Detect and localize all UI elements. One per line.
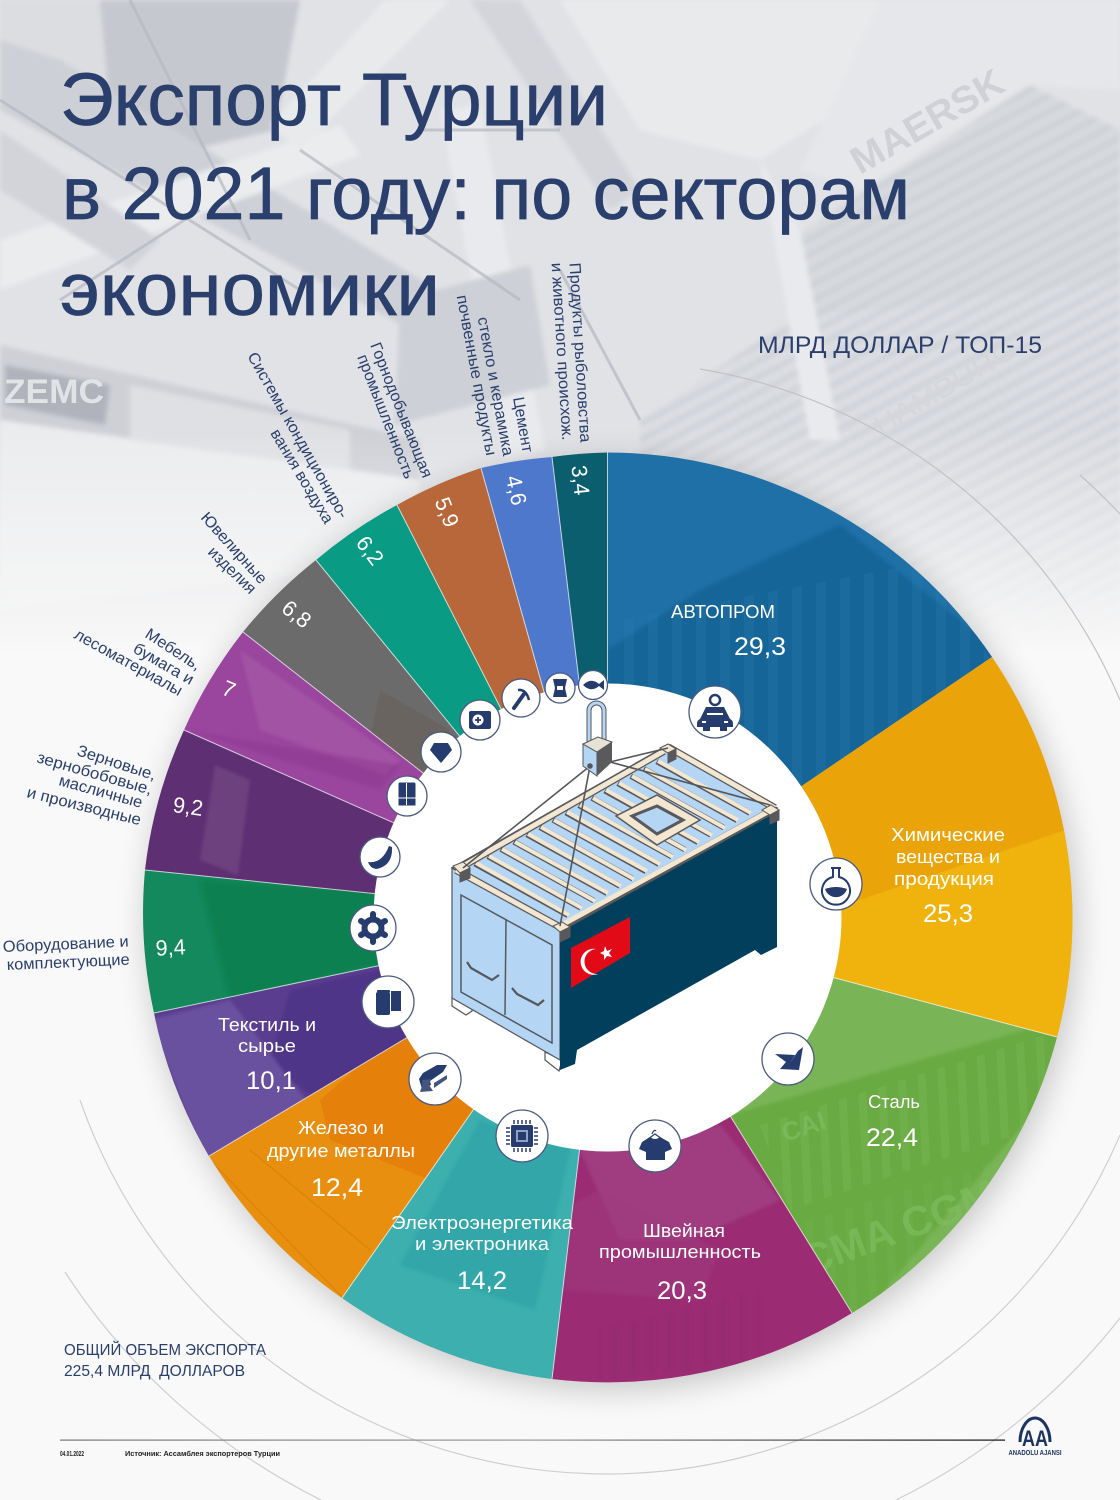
sector: electronics	[342, 1110, 580, 1379]
labels inside sectors: 20,3	[657, 1277, 707, 1305]
icon: textile rolls	[362, 976, 414, 1028]
labels inside sectors: 12,4	[311, 1174, 363, 1202]
footer rule	[60, 1440, 1005, 1441]
title: Экспорт Турции	[60, 58, 608, 141]
icon: banana	[360, 837, 400, 877]
labels inside sectors: Железо и	[298, 1118, 384, 1138]
donut chart	[143, 452, 1080, 1382]
sector: cement and glass	[481, 457, 608, 918]
labels inside sectors: АВТОПРОМ	[671, 602, 775, 622]
icon: diamond	[421, 732, 461, 772]
date: 04.01.2022	[60, 1451, 84, 1458]
sector: apparel	[552, 1116, 852, 1382]
outer sector labels: лесоматериалы	[71, 626, 185, 700]
total exports note: 225,4 МЛРД ДОЛЛАРОВ	[64, 1363, 245, 1380]
labels inside sectors: Химические	[891, 825, 1005, 845]
sector: fishery	[552, 452, 608, 918]
icon: iron beam	[409, 1053, 461, 1105]
total exports note: ОБЩИЙ ОБЪЕМ ЭКСПОРТА	[64, 1340, 266, 1359]
crane rigging lines	[463, 748, 770, 926]
sector: automotive	[608, 452, 992, 786]
background: port photo: MAERSK	[844, 61, 1012, 183]
labels inside sectors: 9,2	[171, 792, 205, 821]
title	[60, 58, 910, 331]
outer sector labels: бумага и	[130, 640, 197, 689]
outer sector labels: Системы кондициониро-	[244, 350, 351, 521]
outer sector labels	[2, 262, 593, 974]
labels inside sectors: 3,4	[566, 464, 594, 496]
container feet	[452, 998, 562, 1071]
outer sector labels: почвенные продукты	[453, 294, 499, 457]
outer sector labels: Горнодобывающая	[366, 340, 435, 480]
labels inside sectors: 29,3	[734, 633, 786, 661]
labels inside sectors: другие металлы	[267, 1141, 415, 1161]
labels inside sectors: 6,2	[351, 531, 389, 570]
logo: Anadolu Ajansi: ANADOLU AJANSI	[1008, 1450, 1062, 1457]
labels inside sectors: Электроэнергетика	[391, 1213, 574, 1233]
center hole	[374, 684, 842, 1152]
labels inside sectors: промышленность	[599, 1242, 761, 1262]
sector: chemicals	[801, 657, 1072, 1037]
sector: furniture and paper	[184, 632, 423, 822]
outer sector labels: Оборудование и	[2, 934, 129, 956]
outer sector labels: и производные	[25, 784, 143, 829]
icon: shirt	[629, 1120, 681, 1172]
labels inside sectors: вещества и	[896, 847, 1000, 867]
labels inside sectors: и электроника	[415, 1234, 550, 1254]
container roof	[452, 745, 777, 928]
sector: mining	[397, 468, 608, 918]
sector: air conditioning	[316, 505, 608, 918]
icon: gear	[350, 905, 396, 951]
door outlines and handles	[461, 895, 552, 1043]
labels inside sectors: Швейная	[643, 1221, 725, 1241]
sector: steel	[730, 978, 1057, 1313]
outer sector labels: комплектующие	[6, 952, 130, 974]
title: в 2021 году: по секторам	[62, 152, 910, 235]
outer sector labels: Продукты рыболовства	[566, 262, 593, 443]
labels inside sectors: Сталь	[868, 1092, 920, 1112]
logo: Anadolu Ajansi	[1008, 1418, 1062, 1457]
icon: fish	[578, 670, 608, 700]
outer sector labels: изделия	[204, 544, 259, 598]
labels inside sectors	[155, 464, 1005, 1305]
outer sector labels: зернобобовые,	[35, 750, 154, 799]
source: Источник: Ассамблея экспортеров Турции	[125, 1450, 280, 1458]
outer sector labels: Зерновые,	[75, 743, 158, 784]
outer sector labels: Цемент	[509, 396, 536, 454]
outer sector labels: и животного происхож.	[548, 262, 575, 441]
background: port photo: HAMBURG	[868, 334, 1022, 440]
container left door face	[452, 868, 560, 1060]
corner blocks	[453, 744, 779, 942]
sector: iron and metals	[209, 1038, 474, 1298]
sector: textiles	[154, 966, 407, 1156]
sector: jewelry	[243, 560, 460, 774]
icon: microchip	[496, 1110, 548, 1162]
labels inside sectors: продукция	[894, 869, 994, 889]
unit note: МЛРД ДОЛЛАР / ТОП-15	[758, 332, 1042, 359]
icon: appliance	[460, 700, 500, 740]
icon: steel beams	[762, 1033, 814, 1085]
total exports note	[64, 1340, 266, 1380]
illustration: shipping container on crane hook	[452, 703, 779, 1071]
outer sector labels: промышленность	[353, 352, 417, 481]
sector: grains	[145, 730, 394, 894]
labels inside sectors: Текстиль и	[218, 1015, 316, 1035]
outer sector labels: масличные	[57, 772, 144, 812]
logo: Anadolu Ajansi: AA	[1022, 1426, 1048, 1451]
labels inside sectors: 10,1	[246, 1067, 296, 1095]
title: экономики	[60, 248, 440, 331]
sector: steel: CMA CGM	[795, 1171, 1003, 1284]
background: port photo: ZEMC	[4, 373, 104, 411]
labels inside sectors: 6,8	[277, 595, 316, 633]
labels inside sectors: 14,2	[457, 1267, 507, 1295]
icon: pickaxe	[502, 679, 540, 717]
outer sector labels: Мебель,	[142, 626, 204, 674]
labels inside sectors: 4,6	[501, 473, 532, 508]
labels inside sectors: 9,4	[155, 934, 186, 961]
icon: wardrobe	[387, 776, 427, 816]
labels inside sectors: сырье	[238, 1036, 296, 1056]
pie drop shadow	[147, 460, 1077, 1390]
container dark side	[560, 808, 777, 1070]
crane hook	[583, 703, 612, 776]
icon: flask	[810, 858, 862, 910]
sector: machinery	[143, 870, 378, 1013]
outer sector labels: стекло и керамика	[474, 316, 516, 457]
labels inside sectors: 22,4	[866, 1124, 918, 1152]
labels inside sectors: 5,9	[430, 494, 464, 531]
icon: car	[689, 686, 741, 738]
labels inside sectors: 7	[218, 675, 239, 703]
labels inside sectors: 25,3	[923, 900, 973, 928]
icon: cement sack	[545, 673, 575, 703]
Turkish flag	[571, 917, 630, 988]
outer sector labels: вания воздуха	[267, 426, 336, 527]
outer sector labels: Ювелирные	[197, 509, 270, 588]
sector: steel: CAI	[778, 1105, 829, 1148]
